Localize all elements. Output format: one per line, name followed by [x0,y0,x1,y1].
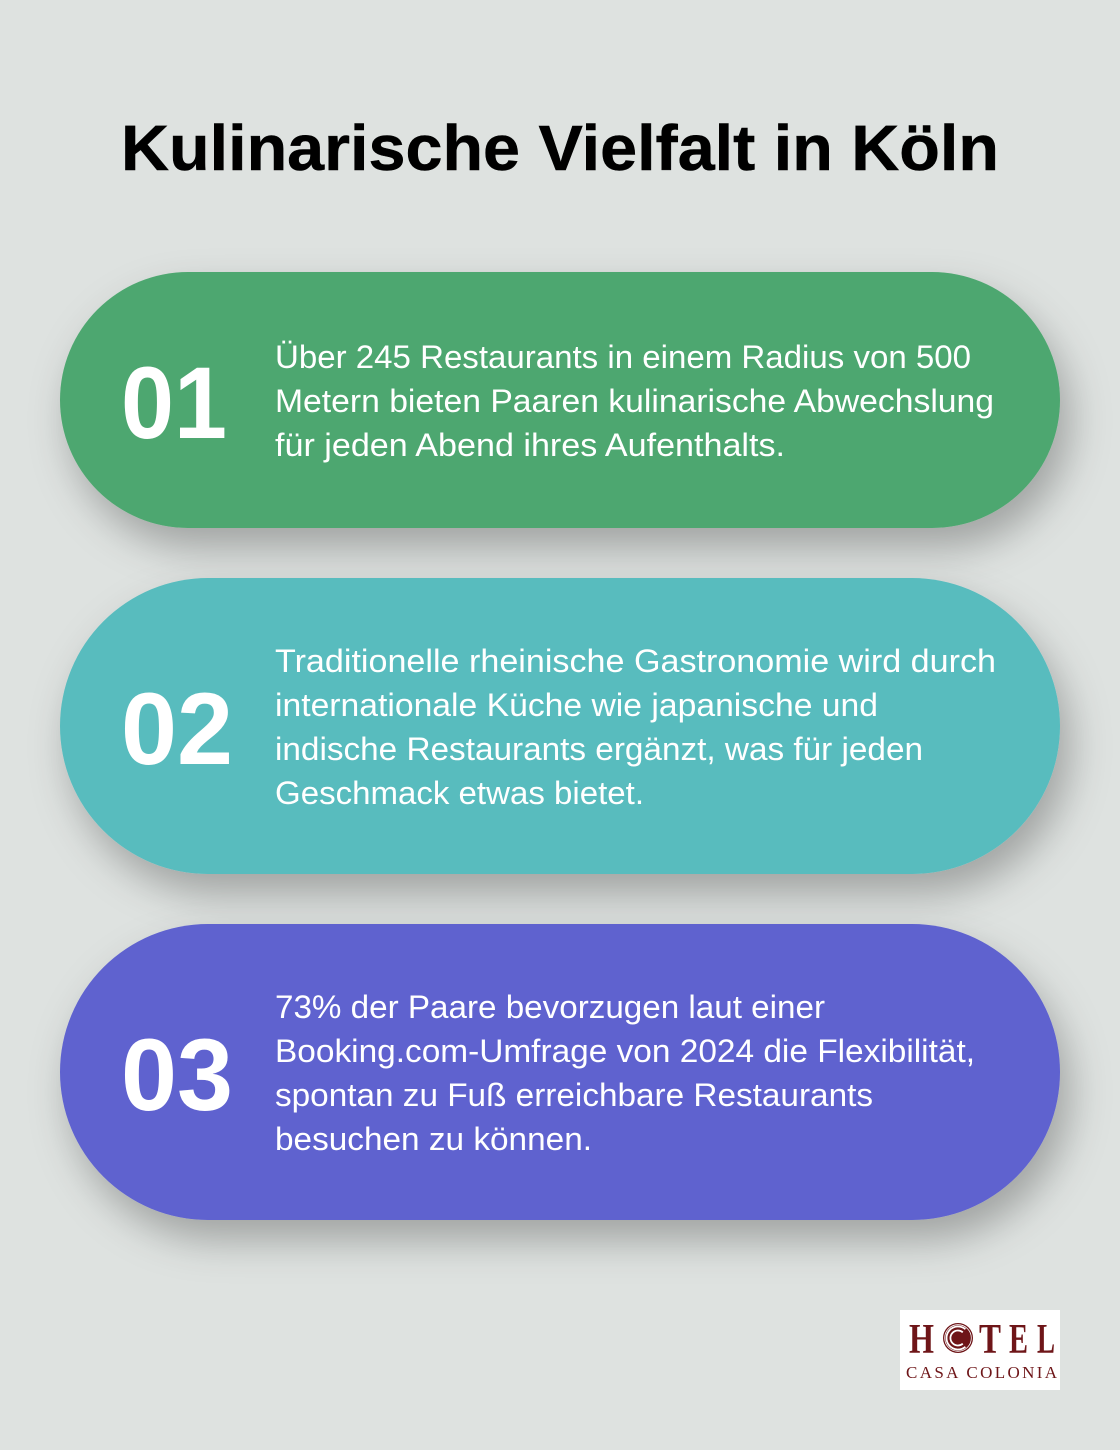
text block: item 03: spontan zu Fuß erreichbare Restaurants [275,1077,873,1113]
logo wordmark: T: T [979,1317,1001,1363]
number 01: 01 [121,346,227,460]
logo wordmark: L: L [1037,1317,1055,1363]
logo background [900,1310,1060,1390]
text block: item 02 [275,643,996,811]
text block: item 02: Traditionelle rheinische Gastronomie wird durch [275,643,996,679]
pill background: green [60,272,1060,528]
text block: item 01: Metern bieten Paaren kulinarische Abwechslung [275,383,994,419]
text block: item 03: besuchen zu können. [275,1121,592,1157]
logo wordmark: H: H [909,1317,934,1363]
text block: item 02: Geschmack etwas bietet. [275,775,644,811]
logo wordmark: E: E [1009,1317,1028,1363]
icon: concentric circle O [943,1323,973,1353]
pill background: purple [60,924,1060,1220]
number 03: 03 [121,1018,233,1132]
text block: item 01 [275,339,994,463]
logo wordmark: Casa Colonia: CASA COLONIA [906,1363,1058,1382]
pill background: teal [60,578,1060,874]
logo: Hotel Casa Colonia [900,1310,1060,1390]
title: Kulinarische Vielfalt in Köln [121,112,999,184]
text block: item 03: Booking.com-Umfrage von 2024 die Flexibilität, [275,1033,975,1069]
panel: item 02 [60,578,1060,874]
panel: item 01 [60,272,1060,528]
text block: item 01: für jeden Abend ihres Aufenthalts. [275,427,785,463]
text block: item 02: internationale Küche wie japanische und [275,687,878,723]
text block: item 03 [275,989,975,1157]
panel: item 03 [60,924,1060,1220]
text block: item 01: Über 245 Restaurants in einem Radius von 500 [275,339,971,375]
text block: item 02: indische Restaurants ergänzt, was für jeden [275,731,923,767]
text block: item 03: 73% der Paare bevorzugen laut einer [275,989,825,1025]
number 02: 02 [121,672,233,786]
